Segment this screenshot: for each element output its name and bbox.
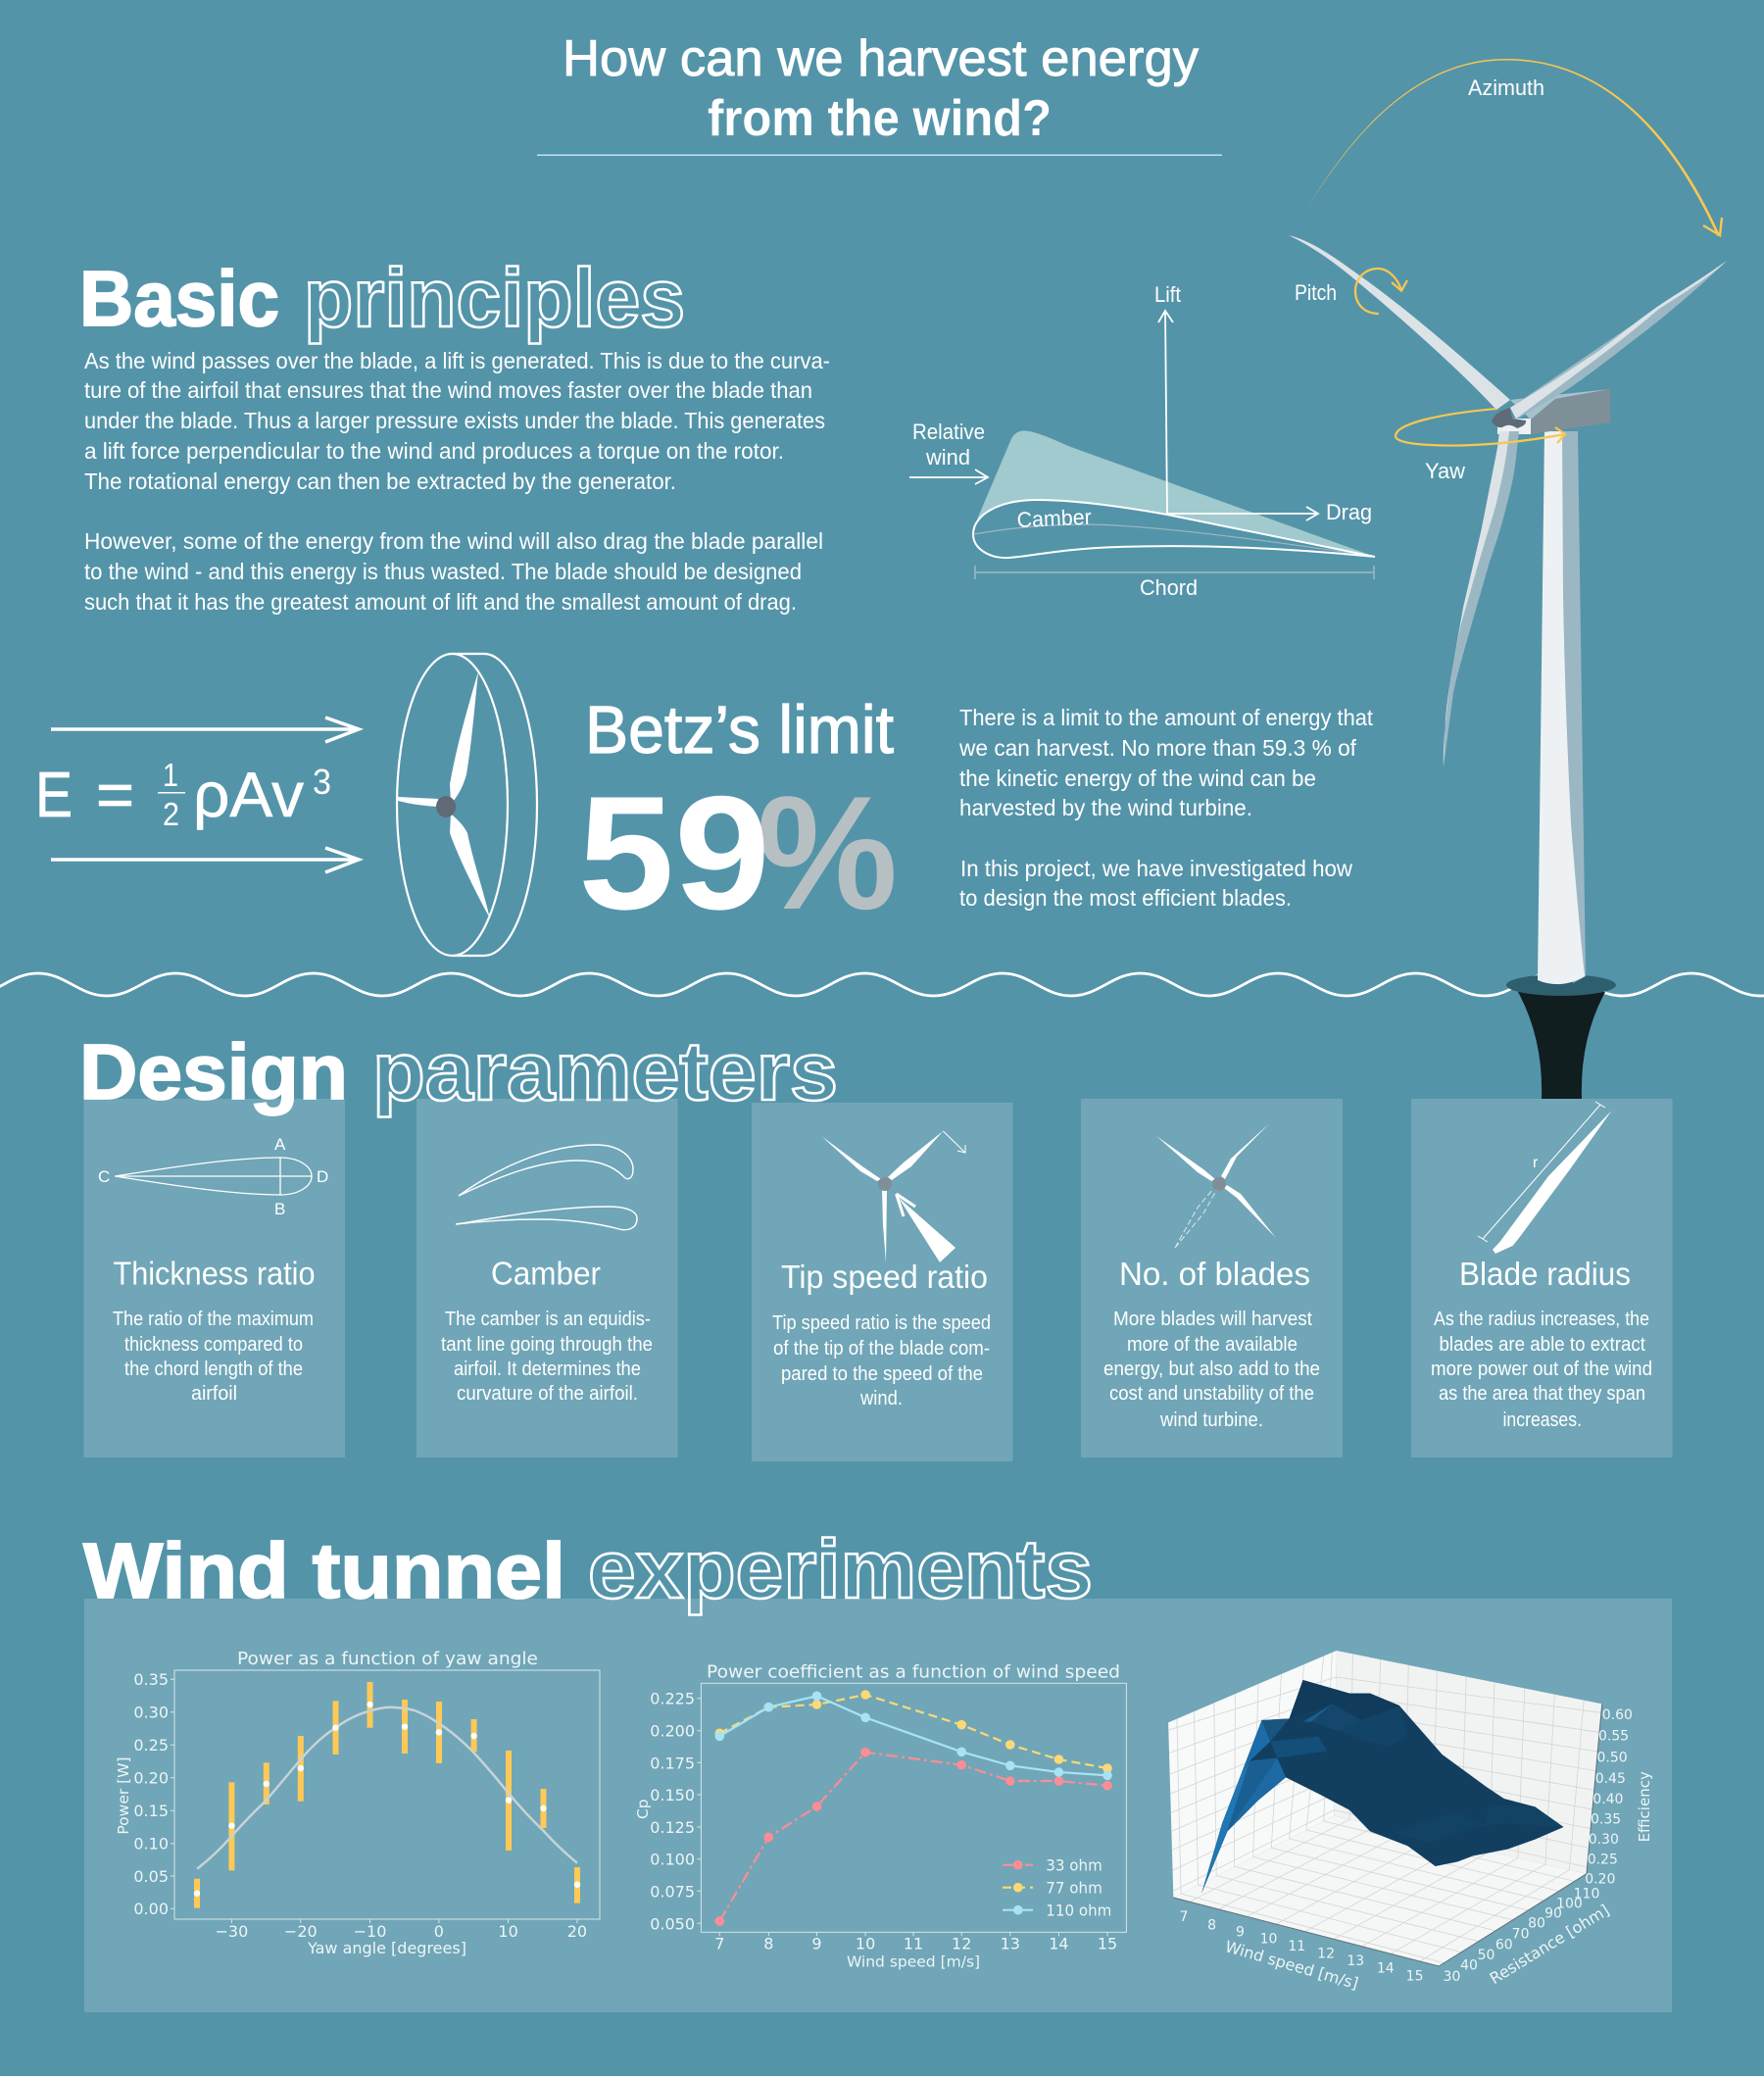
efficiency tick labels: 0.25	[1588, 1853, 1618, 1868]
resistance tick labels: 50	[1478, 1948, 1494, 1963]
hub	[1492, 408, 1526, 428]
betz percentage: 59	[578, 763, 770, 943]
pitch arrow	[1355, 269, 1407, 314]
panel: camber: airfoil. It determines the	[454, 1359, 641, 1380]
legend: 77 ohm	[1046, 1878, 1102, 1898]
resistance tick labels: 40	[1460, 1957, 1478, 1973]
text block: lift explanation: However, some of the energy from the wind will also drag the blade parallel	[84, 528, 823, 554]
airfoil labels	[912, 282, 1372, 600]
panel: tip speed ratio	[752, 1103, 1013, 1461]
x axis labels: 9	[811, 1935, 822, 1952]
chart: power coefficient vs wind speed: Cp	[634, 1799, 652, 1819]
text block: betz explanation: the kinetic energy of the wind can be	[959, 766, 1316, 791]
panel: camber: The camber is an equidis-	[445, 1309, 651, 1330]
chord dimension line	[975, 566, 1374, 579]
chart: power coefficient vs wind speed	[634, 1662, 1126, 1971]
efficiency tick labels	[1585, 1707, 1633, 1888]
3d axis titles: Resistance [ohm]	[1487, 1901, 1612, 1988]
efficiency tick labels: 0.40	[1592, 1792, 1623, 1807]
chart: power vs yaw angle	[115, 1649, 600, 1957]
y axis labels: 0.05	[133, 1867, 169, 1886]
legend: 110 ohm	[1046, 1902, 1111, 1919]
data points	[194, 1702, 580, 1897]
x axis labels: 13	[1001, 1935, 1020, 1952]
x axis labels: 10	[856, 1935, 875, 1952]
text block: lift explanation: such that it has the greatest amount of lift and the smallest amount of drag.	[84, 589, 797, 615]
tower	[1561, 431, 1586, 983]
x axis labels: 0	[434, 1922, 444, 1941]
efficiency tick labels: 0.60	[1602, 1707, 1633, 1723]
y axis labels: 0.125	[650, 1818, 695, 1837]
panel: number of blades: More blades will harvest	[1113, 1309, 1312, 1330]
panel: number of blades	[1081, 1099, 1343, 1458]
icon: blade with radius: r	[1533, 1155, 1539, 1171]
airfoil labels: Camber	[1016, 505, 1092, 532]
heading: wind tunnel experiments	[83, 1523, 1093, 1615]
water platform	[1506, 974, 1616, 996]
efficiency tick labels: 0.20	[1585, 1872, 1615, 1888]
panel: blade radius: increases.	[1503, 1409, 1582, 1431]
text block: betz explanation: to design the most efficient blades.	[959, 885, 1292, 911]
icon: rotor with velocity arrows	[821, 1131, 965, 1262]
heading: basic principles: principles	[304, 252, 685, 344]
wind speed tick labels: 13	[1347, 1953, 1364, 1969]
equation: 1	[163, 757, 178, 793]
icon: cambered airfoils	[456, 1145, 637, 1230]
panel: number of blades: cost and unstability of the	[1109, 1383, 1314, 1405]
text block: lift explanation: to the wind - and this energy is thus wasted. The blade should be designed	[84, 559, 802, 584]
text block: lift explanation	[84, 348, 830, 615]
equation: 3	[313, 762, 331, 802]
efficiency tick labels: 0.55	[1598, 1729, 1629, 1745]
heading: wind tunnel experiments: Wind tunnel	[83, 1527, 565, 1614]
y axis labels: 0.225	[650, 1690, 695, 1708]
text block: betz explanation	[958, 705, 1374, 911]
series: 110 ohm	[715, 1692, 1112, 1780]
airfoil labels: Relative	[912, 420, 985, 444]
panel: tip speed ratio: pared to the speed of the	[781, 1363, 983, 1385]
3d axes panes and surface	[1168, 1651, 1602, 1966]
y axis labels: 0.10	[133, 1835, 169, 1853]
legend	[1003, 1856, 1111, 1919]
panel: camber: curvature of the airfoil.	[457, 1383, 638, 1405]
x axis labels: 11	[904, 1935, 923, 1952]
text block: lift explanation: under the blade. Thus a larger pressure exists under the blade. This generates	[84, 408, 825, 433]
relative wind arrow	[909, 470, 988, 484]
icon: symmetric airfoil	[115, 1158, 312, 1195]
y axis labels: 0.175	[650, 1754, 695, 1772]
panel: tip speed ratio: Tip speed ratio	[781, 1259, 988, 1295]
icon labels: A	[274, 1135, 286, 1154]
wind arrows	[51, 717, 359, 872]
x axis labels: 15	[1098, 1935, 1117, 1952]
icon: blade with radius	[1478, 1102, 1612, 1254]
turbine labels	[1295, 75, 1544, 483]
panel: number of blades: No. of blades	[1119, 1256, 1310, 1292]
chart: 3d efficiency surface	[1168, 1651, 1653, 1993]
airfoil outline	[973, 500, 1375, 558]
x axis labels: −10	[354, 1922, 386, 1941]
x axis labels: 8	[763, 1935, 773, 1952]
panel: tip speed ratio: of the tip of the blade com-	[773, 1338, 990, 1359]
x axis labels: 14	[1049, 1935, 1069, 1952]
icon labels: C	[98, 1167, 110, 1186]
icon labels	[98, 1135, 328, 1218]
panel: blade radius: as the area that they span	[1439, 1383, 1645, 1405]
panel: camber	[416, 1099, 678, 1458]
blade: lower	[1444, 431, 1519, 766]
wind speed tick labels: 8	[1207, 1917, 1216, 1933]
equation: ρAv	[193, 759, 305, 830]
3d axis titles	[1223, 1771, 1653, 1993]
betz percentage	[578, 763, 898, 943]
turbine foundation	[1518, 992, 1605, 1099]
equation: E	[35, 759, 73, 830]
series: 77 ohm	[715, 1690, 1112, 1773]
x axis labels: 7	[714, 1935, 724, 1952]
equation: 2	[163, 796, 179, 832]
panel: wind tunnel experiments	[84, 1599, 1672, 2012]
turbine labels: Yaw	[1425, 459, 1465, 483]
resistance tick labels: 70	[1512, 1926, 1530, 1942]
error bars	[194, 1682, 580, 1908]
turbine labels: Azimuth	[1468, 75, 1544, 100]
airfoil labels: Chord	[1140, 575, 1198, 600]
actuator disk with rotor	[397, 654, 537, 956]
blade: upper left	[1289, 235, 1510, 410]
airfoil labels: Drag	[1326, 500, 1372, 524]
y axis labels: 0.075	[650, 1882, 695, 1901]
text block: lift explanation: ture of the airfoil that ensures that the wind moves faster over the blade than	[84, 377, 812, 403]
resistance tick labels: 30	[1444, 1969, 1460, 1985]
panel: tip speed ratio: wind.	[859, 1388, 903, 1409]
y axis labels	[650, 1690, 695, 1933]
blade: upper right	[1510, 261, 1727, 420]
series: 33 ohm	[715, 1748, 1112, 1926]
y axis labels: 0.150	[650, 1786, 695, 1804]
icon labels: B	[274, 1200, 285, 1218]
wind speed tick labels: 11	[1288, 1939, 1305, 1954]
wind speed tick labels: 7	[1179, 1909, 1188, 1925]
efficiency tick labels: 0.35	[1591, 1811, 1621, 1827]
y axis labels: 0.200	[650, 1722, 695, 1741]
panel: number of blades: energy, but also add to the	[1103, 1359, 1320, 1380]
x axis labels	[216, 1922, 587, 1941]
efficiency tick labels: 0.45	[1595, 1771, 1626, 1787]
wind speed tick labels: 12	[1317, 1946, 1335, 1961]
panel: thickness ratio: the chord length of the	[124, 1359, 303, 1380]
heading: basic principles	[79, 252, 685, 344]
camber line	[974, 524, 1375, 557]
y axis labels: 0.00	[133, 1900, 169, 1918]
panel: blade radius: blades are able to extract	[1439, 1334, 1645, 1356]
panel: thickness ratio: thickness compared to	[124, 1334, 303, 1356]
panel: thickness ratio: airfoil	[191, 1383, 237, 1405]
efficiency tick labels: 0.30	[1589, 1832, 1619, 1848]
panel: camber: Camber	[491, 1256, 601, 1292]
panel: blade radius	[1411, 1099, 1672, 1458]
title: from the wind?	[708, 90, 1052, 147]
yaw arrow	[1396, 409, 1565, 445]
axis ticks	[697, 1699, 1107, 1936]
x axis labels: 20	[567, 1922, 587, 1941]
airfoil diagram	[909, 282, 1375, 600]
panel: camber: tant line going through the	[441, 1334, 653, 1356]
efficiency tick labels: 0.50	[1597, 1750, 1628, 1765]
x axis labels: −30	[216, 1922, 248, 1941]
legend: 33 ohm	[1046, 1856, 1102, 1874]
wind speed tick labels: 9	[1236, 1925, 1245, 1941]
chart title: Power as a function of yaw angle	[237, 1649, 538, 1669]
text block: betz explanation: we can harvest. No more than 59.3 % of	[958, 735, 1357, 761]
x axis labels	[714, 1935, 1117, 1952]
text block: betz explanation: In this project, we have investigated how	[960, 856, 1352, 881]
text block: betz explanation: There is a limit to the amount of energy that	[959, 705, 1374, 730]
airfoil labels: Lift	[1154, 282, 1181, 307]
x axis labels: 10	[498, 1922, 518, 1941]
text block: lift explanation: As the wind passes over the blade, a lift is generated. This is due to the curva-	[84, 348, 830, 373]
betz percentage: %	[757, 763, 898, 943]
wind speed tick labels: 14	[1377, 1961, 1395, 1977]
y axis labels: 0.15	[133, 1802, 169, 1820]
3d axis titles: Wind speed [m/s]	[1223, 1937, 1360, 1993]
wind speed tick labels	[1179, 1909, 1424, 1985]
axis titles: Wind speed [m/s]	[847, 1953, 980, 1971]
icon: rotor with dashed blade	[1156, 1123, 1276, 1248]
panel: blade radius: As the radius increases, the	[1434, 1309, 1649, 1330]
y axis labels: 0.100	[650, 1851, 695, 1869]
fitted curve	[197, 1707, 577, 1869]
airfoil labels: wind	[925, 445, 970, 470]
turbine labels: Pitch	[1295, 280, 1337, 305]
wave divider	[0, 973, 1764, 996]
wind speed tick labels: 10	[1260, 1932, 1277, 1948]
wind speed tick labels: 15	[1406, 1969, 1424, 1985]
azimuth arrow	[1305, 59, 1722, 236]
axis ticks	[171, 1679, 577, 1923]
x axis labels: 12	[952, 1935, 971, 1952]
resistance tick labels: 80	[1528, 1916, 1545, 1932]
panel: blade radius: Blade radius	[1459, 1256, 1631, 1292]
panel: number of blades: wind turbine.	[1159, 1409, 1263, 1431]
text block: lift explanation: The rotational energy can then be extracted by the generator.	[84, 469, 676, 494]
y axis labels: 0.25	[133, 1736, 169, 1755]
lift arrow	[1158, 311, 1173, 515]
y axis labels: 0.35	[133, 1670, 169, 1689]
heading: design parameters: Design	[79, 1028, 348, 1115]
y axis labels: 0.050	[650, 1914, 695, 1933]
panel: thickness ratio	[84, 1099, 345, 1458]
axis titles: Yaw angle [degrees]	[307, 1939, 466, 1957]
title: How can we harvest energy	[563, 30, 1199, 87]
chart title: Power coefficient as a function of wind speed	[707, 1662, 1120, 1683]
panel: tip speed ratio: Tip speed ratio is the speed	[772, 1312, 991, 1334]
title	[537, 30, 1222, 156]
y axis labels: 0.20	[133, 1768, 169, 1788]
resistance tick labels: 60	[1495, 1937, 1513, 1952]
heading: design parameters: parameters	[372, 1025, 838, 1117]
resistance tick labels: 100	[1556, 1897, 1583, 1912]
betz limit heading: Betz’s limit	[585, 692, 894, 767]
wind turbine illustration	[1289, 59, 1727, 1099]
resistance tick labels	[1444, 1887, 1599, 1985]
heading: design parameters	[79, 1025, 838, 1117]
panel: blade radius: more power out of the wind	[1431, 1359, 1652, 1380]
x axis labels: −20	[284, 1922, 318, 1941]
panel: number of blades: more of the available	[1127, 1334, 1298, 1356]
panel: thickness ratio: Thickness ratio	[114, 1256, 316, 1292]
resistance tick labels: 90	[1544, 1906, 1562, 1922]
text block: lift explanation: a lift force perpendicular to the wind and produces a torque on the rotor.	[84, 438, 784, 464]
3d axis titles: Efficiency	[1636, 1771, 1653, 1842]
panel: thickness ratio: The ratio of the maximum	[113, 1309, 314, 1330]
equation: =	[96, 759, 134, 830]
airfoil pressure shading	[977, 430, 1375, 557]
text block: betz explanation: harvested by the wind turbine.	[959, 795, 1252, 820]
heading: basic principles: Basic	[79, 255, 279, 342]
equation	[35, 757, 331, 832]
drag arrow	[1167, 507, 1318, 520]
heading: wind tunnel experiments: experiments	[588, 1523, 1093, 1615]
icon labels: D	[317, 1167, 328, 1186]
nacelle	[1510, 389, 1610, 420]
resistance tick labels: 110	[1574, 1887, 1599, 1903]
y axis labels	[133, 1670, 169, 1918]
chart: power vs yaw angle: Power [W]	[115, 1756, 132, 1835]
y axis labels: 0.30	[133, 1704, 169, 1721]
